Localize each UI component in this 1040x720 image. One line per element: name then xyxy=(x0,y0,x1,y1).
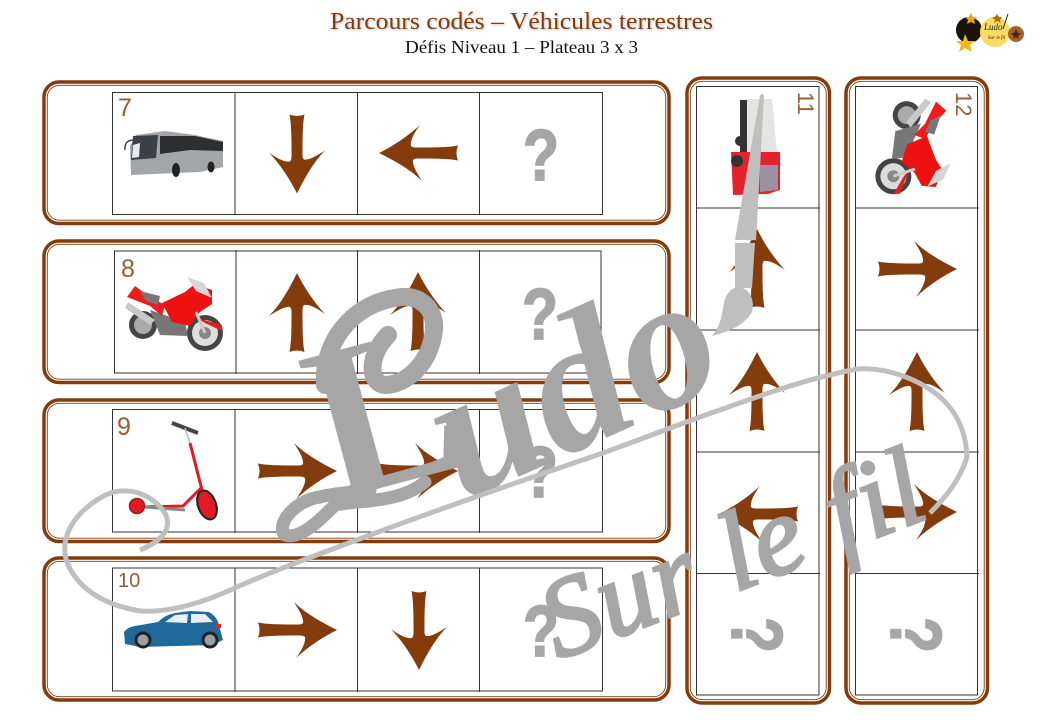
number 11: 11 xyxy=(793,92,818,115)
arrow: up xyxy=(729,352,785,431)
arrow: left xyxy=(379,125,458,181)
number 8: 8 xyxy=(121,255,135,283)
unknown: question mark: ? xyxy=(522,433,558,513)
arrow: down xyxy=(391,591,447,670)
icon: rotated motorcycle xyxy=(874,95,956,199)
arrow: up xyxy=(269,273,325,352)
unknown: rotated question mark: ? xyxy=(716,617,796,653)
panel: challenge 7 xyxy=(44,82,669,224)
logo xyxy=(956,13,1024,52)
number 10: 10 xyxy=(118,570,140,592)
logo: Sur le fil xyxy=(988,36,1006,41)
subtitle: Défis Niveau 1 – Plateau 3 x 3 xyxy=(405,37,638,57)
watermark: Ludo sur le fil xyxy=(65,94,967,683)
arrow: right xyxy=(878,484,957,540)
unknown: question mark: ? xyxy=(523,592,559,672)
panel: challenge 8 xyxy=(44,241,669,382)
icon: paintbrush xyxy=(712,94,764,336)
logo: Ludo xyxy=(983,22,1003,32)
icon: fire truck xyxy=(731,99,780,195)
number 12: 12 xyxy=(951,92,976,116)
arrow: up xyxy=(390,272,446,351)
unknown: rotated question mark: ? xyxy=(875,617,955,653)
panel: challenge 10 xyxy=(44,558,669,700)
panel: challenge 11 xyxy=(687,78,830,703)
arrow: up xyxy=(729,229,785,308)
arrow: right xyxy=(878,241,957,297)
arrow: right xyxy=(258,602,337,658)
watermark flourish xyxy=(65,369,967,611)
arrow: right xyxy=(258,443,337,499)
number 7: 7 xyxy=(118,94,132,122)
icon: motorcycle xyxy=(125,277,223,351)
unknown: question mark: ? xyxy=(523,116,559,196)
number 9: 9 xyxy=(117,413,131,441)
arrow: right xyxy=(379,443,458,499)
panel: challenge 12 xyxy=(846,78,988,703)
watermark words: sur le fil: Sur le fil xyxy=(523,424,940,683)
icon: scooter xyxy=(130,423,221,522)
icon: car xyxy=(124,611,223,648)
icon: bus xyxy=(125,131,223,177)
watermark word: Ludo: udo xyxy=(394,229,749,540)
panel: challenge 9 xyxy=(44,400,669,542)
title: Parcours codés – Véhicules terrestres xyxy=(330,9,713,35)
arrow: down xyxy=(269,114,325,194)
unknown: question mark: ? xyxy=(522,275,558,355)
watermark word: Ludo: L xyxy=(281,274,486,547)
arrow: up xyxy=(889,352,945,431)
arrow: left xyxy=(719,486,798,542)
